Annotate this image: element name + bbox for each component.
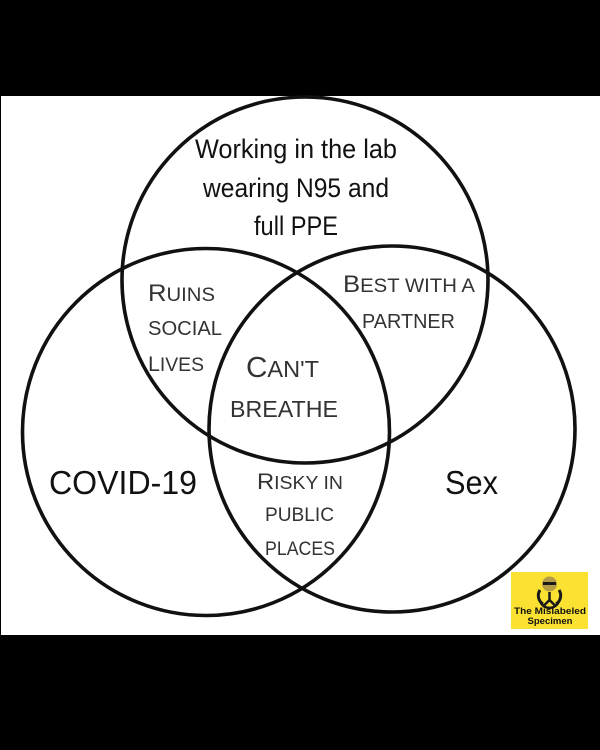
label: best with a partner: [343, 271, 475, 333]
panel: white background: [1, 96, 600, 635]
label: can't breathe: [230, 352, 338, 422]
label: can't breathe: BREATHE: [230, 396, 338, 422]
label: ruins social lives: RUINS: [148, 280, 215, 307]
label: working in the lab: full PPE: [254, 211, 338, 241]
label: sex: Sex: [445, 464, 498, 501]
logo: the mislabeled specimen: [511, 572, 588, 629]
label: working in the lab: wearing N95 and: [202, 173, 389, 203]
circle: working in the lab: [122, 97, 488, 463]
label: best with a partner: BEST WITH A: [343, 271, 475, 298]
label: working in the lab: [195, 134, 397, 241]
icon: biohazard with face: [538, 576, 561, 608]
label: risky in public places: RISKY IN: [257, 469, 343, 494]
label: risky in public places: [257, 469, 343, 560]
logo: the mislabeled specimen: Specimen: [528, 616, 573, 627]
label: risky in public places: PUBLIC: [265, 505, 334, 526]
label: ruins social lives: [148, 280, 222, 376]
circle: sex: [209, 246, 575, 612]
label: risky in public places: PLACES: [265, 539, 335, 560]
circle: COVID-19: [22, 248, 390, 616]
logo: the mislabeled specimen: The Mislabeled: [514, 606, 586, 617]
label: COVID-19: COVID-19: [49, 464, 197, 501]
label: can't breathe: CAN'T: [246, 352, 319, 384]
label: ruins social lives: SOCIAL: [148, 318, 222, 340]
label: best with a partner: PARTNER: [362, 311, 455, 333]
label: ruins social lives: LIVES: [148, 353, 204, 376]
label: working in the lab: Working in the lab: [195, 134, 397, 164]
